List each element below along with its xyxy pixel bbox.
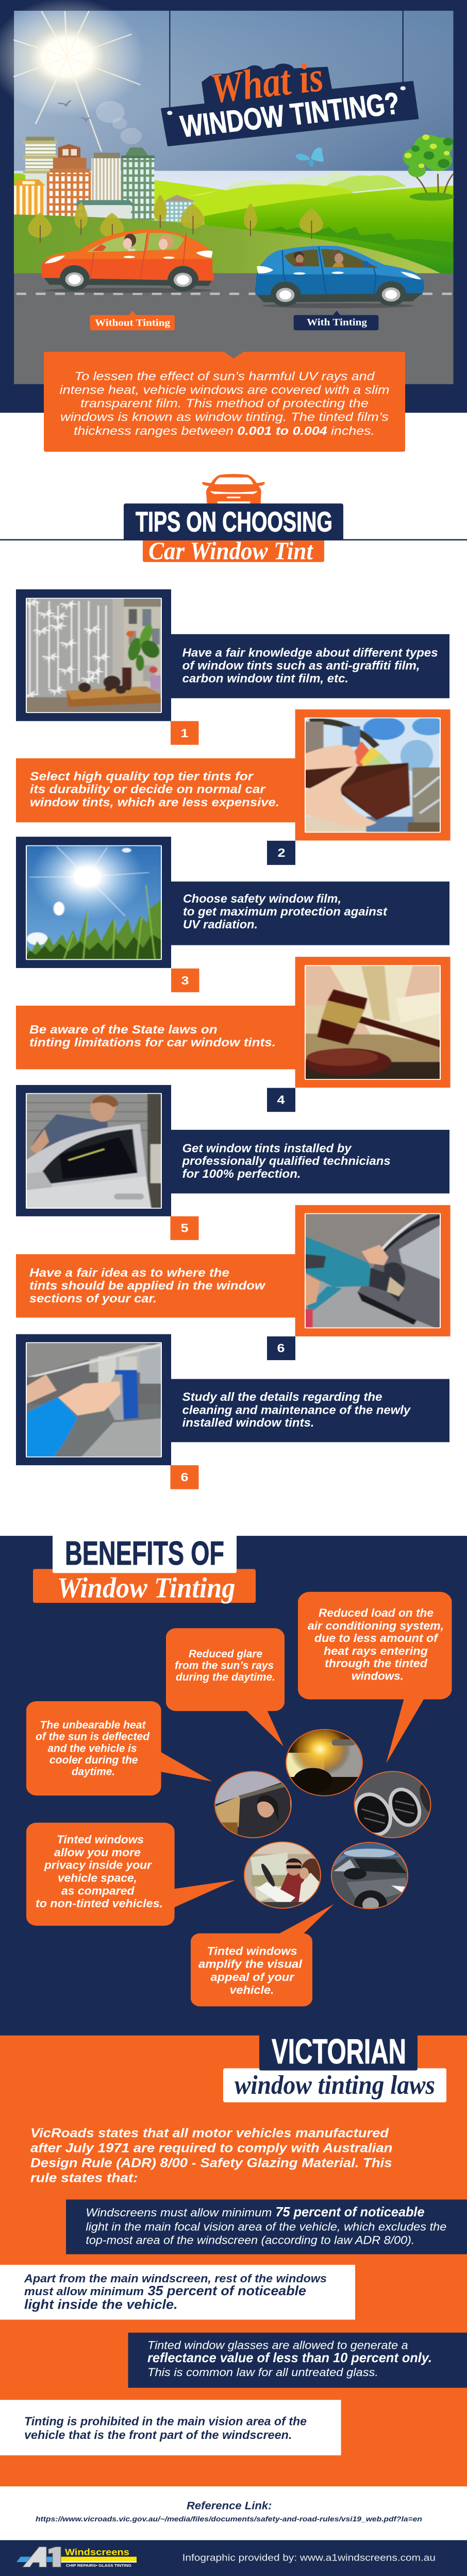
tip text: for 100% perfection.: [182, 1167, 301, 1181]
footer: [0, 2540, 467, 2576]
number badge: [170, 1465, 199, 1489]
tip text: professionally qualified technicians: [182, 1155, 391, 1168]
text bar: [171, 1130, 449, 1193]
laws background: [0, 2036, 467, 2486]
callout text: from the sun’s rays: [175, 1659, 274, 1671]
heading plate: [124, 503, 343, 540]
tip text: to get maximum protection against: [183, 905, 388, 919]
photo: heat gun: [299, 1210, 446, 1332]
panel: tip 5: [16, 1085, 449, 1240]
road markings: [16, 293, 452, 295]
label: with tinting: [294, 311, 378, 330]
reference link: [36, 2500, 422, 2523]
far bushes: [223, 172, 407, 192]
tip text: of window tints such as anti-graffiti film,: [182, 659, 420, 672]
callout: visual appeal: [191, 1904, 334, 2006]
text bar: [171, 1379, 449, 1442]
icon: car front: [202, 474, 265, 504]
image frame: [16, 1085, 171, 1216]
callout text: Tinted windows: [207, 1945, 297, 1958]
photo circle: air vents: [354, 1771, 431, 1838]
rule text: top-most area of the windscreen (according to law ADR 8/00).: [86, 2234, 414, 2247]
footer credit: Infographic provided by: www.a1windscreens.com.au: [182, 2553, 436, 2563]
image frame: [16, 837, 171, 968]
rule text: [86, 2205, 446, 2247]
callout text: and the vehicle is: [48, 1742, 137, 1754]
callout text: daytime.: [72, 1766, 115, 1777]
callout text: Reduced load on the: [319, 1607, 433, 1620]
label: without tinting: Without Tinting: [95, 318, 170, 328]
tip text: [183, 892, 388, 931]
tip text: Choose safety window film,: [183, 892, 341, 905]
tip text: [29, 1266, 266, 1305]
rule text: This is common law for all untreated glass.: [147, 2366, 378, 2379]
intro paragraph: VicRoads states that all motor vehicles manufactured: [30, 2125, 389, 2140]
number badge: 2: [277, 846, 286, 860]
number badge: 6: [277, 1342, 285, 1355]
tip text: Select high quality top tier tints for: [30, 770, 254, 783]
label: without tinting: [90, 311, 175, 330]
photo: sun and grass: [21, 834, 167, 963]
rule text: Apart from the main windscreen, rest of the windows: [24, 2272, 327, 2285]
title: what is: What is: [207, 54, 326, 112]
rule text: Windscreens must allow minimum: [86, 2206, 272, 2219]
number badge: 6: [180, 1470, 189, 1484]
rule text: vehicle that is the front part of the windscreen.: [24, 2428, 292, 2442]
number badge: [267, 1088, 295, 1112]
grass: [262, 226, 453, 259]
callout text: during the daytime.: [176, 1671, 275, 1683]
rule bar 3: [128, 2333, 467, 2388]
heading: tips on choosing: [0, 474, 467, 565]
callout: privacy: [26, 1823, 235, 1926]
image frame: [16, 589, 171, 721]
subheading text: Car Window Tint: [148, 537, 313, 565]
tip text: [30, 770, 279, 809]
panel: tip 2: [16, 709, 451, 865]
callout text: Tinted windows: [57, 1833, 144, 1846]
logo: A1 Windscreens: CHIP REPAIRS• GLASS TINTING: [66, 2564, 131, 2568]
subheading plate: [223, 2068, 446, 2103]
road: [14, 273, 453, 384]
callout text: [308, 1607, 444, 1683]
tip text: [182, 1142, 391, 1181]
buildings: [14, 137, 195, 222]
tip text: sections of your car.: [29, 1292, 157, 1305]
number badge: 5: [180, 1222, 189, 1235]
number badge: [267, 841, 295, 865]
callout text: The unbearable heat: [40, 1719, 146, 1731]
subheading text: Window Tinting: [57, 1572, 236, 1604]
panel: benefits of window tinting: [0, 1534, 467, 2036]
callout: air conditioning: [298, 1592, 452, 1764]
photo: squeegee: [21, 1338, 167, 1461]
tip text: carbon window tint film, etc.: [182, 672, 348, 685]
intro paragraph: Design Rule (ADR) 8/00 - Safety Glazing Material. This: [30, 2155, 392, 2170]
rule bar 1: [66, 2199, 467, 2254]
rule bar 4: [0, 2400, 341, 2455]
photo circle: couple in car: [244, 1841, 321, 1909]
tip text: [29, 1023, 276, 1049]
callout text: amplify the visual: [198, 1958, 303, 1971]
intro paragraph: after July 1971 are required to comply with Australian: [30, 2140, 393, 2155]
tip text: Study all the details regarding the: [182, 1391, 382, 1404]
text bar: [16, 1006, 295, 1070]
reference url: https://www.vicroads.vic.gov.au/~/media/files/documents/safety-and-road-rules/vsi19_web.pdf?la=en: [36, 2515, 422, 2523]
divider line: [0, 539, 467, 540]
text bar: [171, 634, 449, 698]
heading text: TIPS ON CHOOSING: [136, 506, 332, 538]
image frame: [16, 1334, 171, 1465]
callout text: [36, 1719, 150, 1777]
rule text: [147, 2339, 432, 2379]
hills: [14, 173, 453, 274]
tip text: Be aware of the State laws on: [29, 1023, 218, 1036]
callout text: windows.: [352, 1670, 404, 1683]
callout text: to non-tinted vehicles.: [36, 1897, 163, 1910]
sky: [14, 11, 453, 274]
number badge: [170, 1216, 199, 1240]
tip text: [182, 646, 438, 685]
sign holes: [167, 86, 406, 115]
photo: technician applying tint: [21, 1089, 167, 1212]
callout text: through the tinted: [325, 1657, 428, 1670]
callout text: due to less amount of: [314, 1632, 439, 1645]
rule text: Tinting is prohibited in the main vision area of the: [24, 2415, 307, 2428]
intro text: To lessen the effect of sun’s harmful UV rays and: [75, 370, 375, 383]
icon: birds: [58, 100, 90, 121]
image frame: [295, 709, 451, 840]
tip text: tints should be applied in the window: [29, 1279, 266, 1293]
callout text: appeal of your: [210, 1971, 295, 1984]
photo: wallet: [299, 714, 446, 836]
callout text: [175, 1648, 275, 1683]
panel: tip 4: [16, 957, 451, 1112]
sun: [0, 0, 144, 151]
intro text: windows is known as window tinting. The tinted film’s: [60, 410, 389, 423]
rule text: [24, 2272, 327, 2312]
trees: [28, 194, 323, 243]
callout text: of the sun is deflected: [36, 1731, 150, 1742]
intro paragraph: rule states that:: [30, 2170, 138, 2185]
heading plate: [259, 2035, 418, 2071]
panel: victorian window tinting laws: [0, 2032, 467, 2486]
number badge: 1: [180, 727, 189, 740]
panel: tip 3: [16, 834, 449, 992]
text bar: [16, 758, 295, 822]
tip text: [182, 1391, 411, 1429]
rule bar 2: [0, 2265, 355, 2319]
callout: reduced glare: [166, 1628, 285, 1747]
intro text: thickness ranges between 0.001 to 0.004 inches.: [74, 424, 375, 437]
photo circle: glare through windscreen: [286, 1729, 363, 1796]
strings: [170, 11, 403, 112]
photo circle: tinted car: [331, 1842, 408, 1909]
heading text: BENEFITS OF: [65, 1534, 224, 1572]
photo: bamboo window film: [21, 594, 167, 717]
callout text: vehicle.: [230, 1984, 274, 1997]
callout text: privacy inside your: [44, 1859, 152, 1872]
reference heading: Reference Link:: [187, 2500, 272, 2512]
photo circle: woman at car window: [214, 1771, 292, 1838]
rule text: Tinted window glasses are allowed to generate a: [147, 2339, 408, 2352]
tip text: UV radiation.: [183, 918, 258, 931]
tip text: its durability or decide on normal car: [30, 783, 266, 796]
tip text: tinting limitations for car window tints.: [29, 1036, 276, 1049]
intro text: [60, 370, 390, 437]
text bar: [171, 882, 449, 945]
rule text: light inside the vehicle.: [24, 2297, 178, 2312]
callout text: air conditioning system,: [308, 1619, 444, 1632]
hero scene: [0, 0, 454, 384]
subheading plate: [143, 540, 324, 562]
image frame: [295, 1205, 451, 1336]
orange car: [41, 229, 214, 293]
callout text: vehicle space,: [58, 1872, 137, 1885]
intro text: intense heat, vehicle windows are covered with a slim: [60, 383, 390, 397]
tip text: Have a fair idea as to where the: [29, 1266, 229, 1280]
benefits background: [0, 1536, 467, 2036]
number badge: [171, 721, 199, 745]
logo: A1 Windscreens: [16, 2547, 137, 2568]
number badge: 4: [277, 1093, 285, 1107]
panel: tip 7: [16, 1334, 449, 1489]
callout text: heat rays entering: [324, 1645, 428, 1658]
intro text: transparent film. This method of protecting the: [80, 397, 369, 410]
tip text: Get window tints installed by: [182, 1142, 352, 1155]
callout text: [198, 1945, 303, 1997]
callout text: cooler during the: [49, 1754, 138, 1766]
hanging sign: [162, 64, 418, 146]
callout: heat deflected: [26, 1701, 212, 1795]
panel: tip 6: [16, 1205, 451, 1360]
label: with tinting: With Tinting: [307, 317, 367, 328]
panel: hero illustration: [0, 0, 467, 452]
heading plate: [53, 1536, 237, 1573]
footer background: [0, 2540, 467, 2576]
icon: tree right: [403, 134, 454, 201]
rule text: 75 percent of noticeable: [275, 2205, 425, 2219]
image frame: [295, 957, 451, 1088]
photo: gavel and book: [299, 961, 446, 1083]
intro callout: [44, 352, 405, 452]
foreground hill: [14, 214, 441, 274]
callout text: [36, 1833, 163, 1910]
callout text: as compared: [61, 1885, 135, 1897]
tip text: cleaning and maintenance of the newly: [182, 1403, 411, 1417]
callout text: Reduced glare: [189, 1648, 262, 1659]
rule text: 35 percent of noticeable: [148, 2283, 306, 2298]
icon: butterfly: [295, 147, 324, 167]
panel: tip 1: [16, 589, 449, 745]
hero navy background: [0, 0, 467, 413]
tip text: Have a fair knowledge about different types: [182, 646, 438, 659]
rule text: [24, 2415, 307, 2442]
number badge: 3: [181, 974, 189, 988]
blue car: [255, 246, 424, 308]
number badge: [267, 1336, 295, 1360]
rule text: must allow minimum: [24, 2285, 144, 2298]
number badge: [171, 969, 199, 992]
subheading plate: [33, 1569, 256, 1603]
logo: A1 Windscreens: Windscreens: [65, 2547, 129, 2557]
callout text: allow you more: [54, 1846, 141, 1859]
tip text: installed window tints.: [182, 1416, 314, 1429]
tip text: window tints, which are less expensive.: [30, 795, 279, 809]
text bar: [16, 1254, 295, 1317]
intro paragraph: [30, 2125, 393, 2185]
